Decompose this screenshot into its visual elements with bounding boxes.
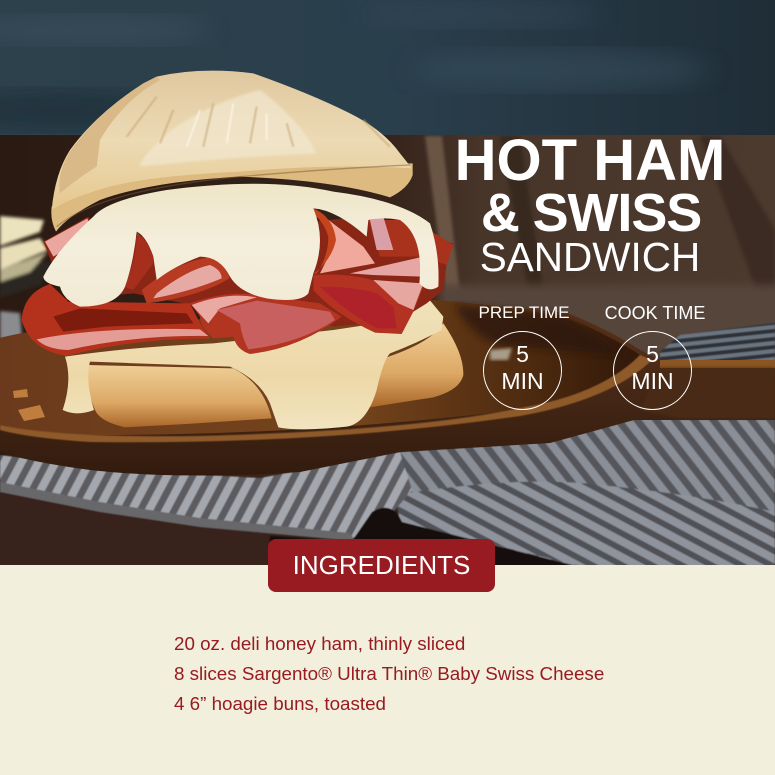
ingredients list <box>174 633 604 714</box>
lower cheese <box>63 298 443 429</box>
ingredients heading: INGREDIENTS <box>293 550 470 580</box>
prep time circle <box>483 331 562 410</box>
prep time circle: 5 <box>516 341 529 367</box>
prep time <box>478 303 570 410</box>
ingredients heading <box>268 539 495 592</box>
center fold of ham <box>190 294 342 354</box>
prep time: PREP TIME <box>478 303 570 322</box>
top bun crown <box>52 71 412 210</box>
hero photo: sandwich on wooden plate <box>0 0 775 565</box>
right fold of ham <box>313 274 423 334</box>
title: SANDWICH <box>480 234 700 280</box>
ingredients list: 8 slices Sargento® Ultra Thin® Baby Swiss Cheese <box>174 663 604 684</box>
bun crust texture <box>127 97 390 147</box>
cook time <box>605 303 705 410</box>
cook time: COOK TIME <box>605 303 705 323</box>
prep time circle: MIN <box>501 368 544 394</box>
bottom bun <box>87 323 463 427</box>
wooden table <box>0 135 775 565</box>
left fold of ham <box>22 284 210 356</box>
ingredients list: 20 oz. deli honey ham, thinly sliced <box>174 633 465 654</box>
title <box>455 128 725 280</box>
ingredients list: 4 6” hoagie buns, toasted <box>174 693 386 714</box>
top bun underside <box>51 163 413 232</box>
slate background <box>0 0 775 136</box>
cook time circle <box>613 331 692 410</box>
crumbs <box>13 389 45 421</box>
ham folds <box>22 208 453 356</box>
upper cheese <box>43 184 439 307</box>
cook time circle: MIN <box>631 368 674 394</box>
ingredients panel <box>0 565 775 775</box>
cheese slices on side plate <box>0 216 52 298</box>
inner ham at top <box>142 257 229 303</box>
title: HOT HAM <box>455 128 725 193</box>
striped towel <box>0 414 775 567</box>
title: & SWISS <box>481 183 701 243</box>
cook time circle: 5 <box>646 341 659 367</box>
sandwich <box>22 71 463 429</box>
wooden plate <box>0 300 775 476</box>
towel behind plate <box>660 323 775 362</box>
